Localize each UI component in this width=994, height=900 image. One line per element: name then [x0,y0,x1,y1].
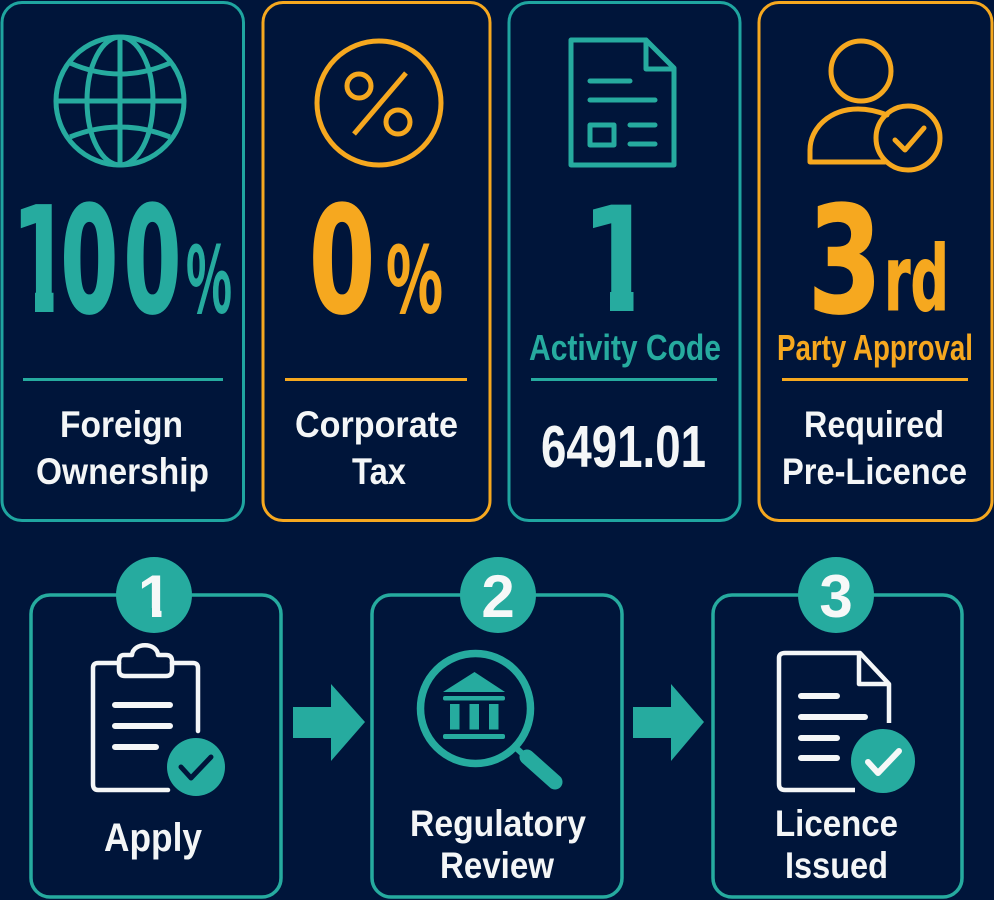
label: required pre-licence: Required [804,404,944,445]
icon: document [571,40,674,165]
icon: approved person [810,41,940,170]
label: 6491.01: 6491.01 [541,414,706,480]
label: required pre-licence: Pre-Licence [782,451,967,492]
label: corporate tax: Tax [352,451,406,492]
label: licence issued: Issued [785,845,888,886]
stat: 0%: 0 [309,176,375,348]
stat: 1 activity code: 1 [579,175,658,346]
stat: 1 activity code [530,204,720,368]
label: corporate tax: Corporate [295,404,458,445]
badge: step 2: 2 [481,563,515,630]
label: regulatory review: Review [440,845,554,886]
badge: step 2 [460,557,536,633]
icon: percent [317,41,441,165]
stat: 100%: 00 [60,176,181,348]
arrow: step 1 to step 2 [293,684,365,761]
panel: activity code [509,2,740,520]
panel: step 2 regulatory review [372,557,622,897]
stat: 3rd party approval: 3 [808,175,882,348]
panel: third party approval [759,2,992,520]
stat: 100%: 1 [11,175,73,347]
label: 6491.01 [531,378,717,480]
label: licence issued [775,803,898,886]
label: regulatory review [410,803,586,886]
label: corporate tax [285,378,467,492]
icon: issued document [779,653,915,793]
stat: 0%: % [386,208,443,338]
stat: 0% [309,176,443,348]
icon: magnifier with bank [420,654,555,782]
badge: step 1: 1 [138,563,171,630]
label: required pre-licence [782,378,968,492]
label: licence issued: Licence [775,803,898,844]
badge: step 3 [798,557,874,633]
label: foreign ownership: Foreign [60,404,183,445]
label: foreign ownership: Ownership [36,451,209,492]
panel: step 3 licence issued [713,557,962,897]
badge: step 3: 3 [819,563,853,630]
arrow: step 2 to step 3 [633,684,704,761]
stat: 100% [20,201,231,315]
label: foreign ownership [23,378,223,492]
stat: 3rd party approval: rd [884,227,949,332]
stat: 1 activity code: Activity Code [529,327,721,368]
panel: corporate tax [263,2,490,520]
label: apply: Apply [104,816,203,860]
panel: foreign ownership [2,2,244,520]
label: regulatory review: Regulatory [410,803,586,844]
stat: 3rd party approval [777,175,973,368]
panel: step 1 apply [31,557,281,897]
badge: step 1 [116,557,192,633]
icon: clipboard [93,645,225,796]
stat: 100%: % [186,208,232,338]
icon: globe [56,37,184,165]
